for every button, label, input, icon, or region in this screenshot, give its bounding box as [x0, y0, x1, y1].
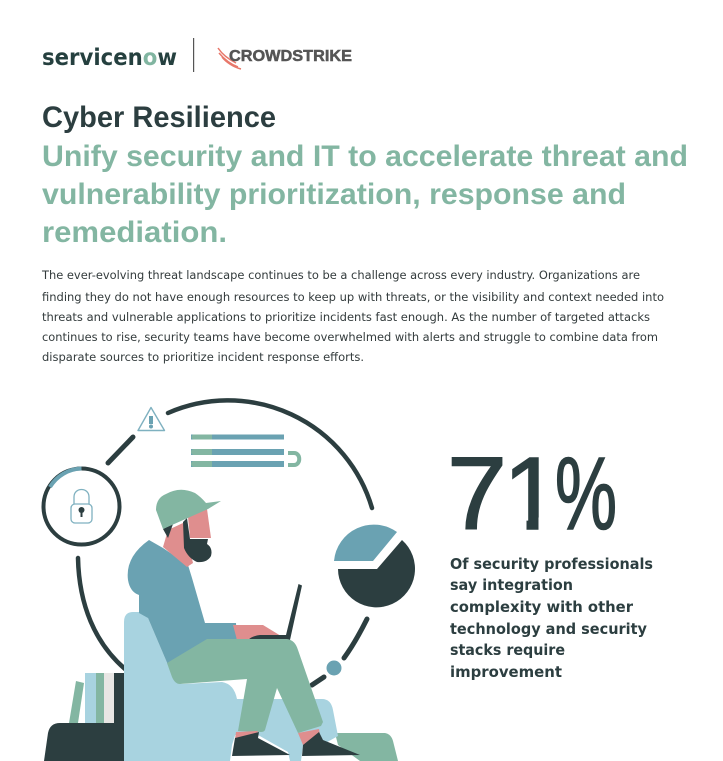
intro paragraph: [41, 269, 664, 364]
subtitle: remediation.: [42, 216, 227, 249]
illustration: analyst on chair with security icons: [44, 400, 415, 761]
statistic caption: [450, 555, 653, 681]
armchair rear: [232, 699, 338, 761]
intro paragraph: The ever-evolving threat landscape continues to be a challenge across every industry. Organizations are: [41, 269, 640, 282]
title: Cyber Resilience: [42, 101, 276, 134]
intro paragraph: finding they do not have enough resources to keep up with threats, or the visibility and context needed into: [42, 291, 664, 304]
statistic caption: improvement: [450, 663, 563, 681]
statistic: 71%: 1: [503, 436, 560, 551]
statistic caption: Of security professionals: [450, 555, 653, 573]
logo divider: [193, 38, 194, 72]
laptop: [248, 584, 302, 640]
statistic caption: complexity with other: [450, 598, 633, 616]
shoes: [232, 732, 360, 756]
intro paragraph: threats and vulnerable applications to prioritize incidents fast enough. As the number of targeted attacks: [42, 311, 650, 324]
armchair front: [124, 612, 240, 761]
arm: [233, 625, 281, 640]
subtitle: vulnerability prioritization, response and: [42, 178, 626, 211]
cap: [156, 490, 221, 529]
logo bar: [42, 38, 352, 72]
ring segments: [78, 400, 372, 685]
ottoman: [335, 733, 398, 761]
icon: warning triangle: [138, 408, 164, 430]
statistic caption: stacks require: [450, 641, 565, 659]
subtitle: [42, 140, 688, 249]
statistic: 71%: %: [555, 436, 617, 551]
face: [188, 509, 211, 538]
logo: crowdstrike: CROWDSTRIKE: [229, 48, 352, 65]
statistic caption: technology and security: [450, 620, 647, 638]
icon: dot: [326, 660, 342, 676]
statistic: 71%: 7: [447, 436, 507, 551]
socks: [235, 729, 320, 745]
legs: [167, 639, 323, 733]
logo: servicenow: servicenow: [42, 43, 177, 71]
beard: [183, 518, 212, 562]
icon: data bars: [191, 434, 299, 467]
hair: [163, 524, 173, 538]
intro paragraph: disparate sources to prioritize incident response efforts.: [42, 351, 364, 364]
torso: [128, 540, 237, 665]
statistic: 71%: [447, 436, 617, 551]
person: [128, 490, 360, 756]
neck: [163, 523, 193, 567]
books and shelf: [44, 673, 125, 761]
icon: padlock dial: [44, 468, 120, 544]
subtitle: Unify security and IT to accelerate threat and: [42, 140, 688, 173]
icon: pie chart: [334, 525, 415, 607]
intro paragraph: continues to rise, security teams have become overwhelmed with alerts and struggle to combine data from: [42, 331, 658, 344]
statistic caption: say integration: [450, 576, 573, 594]
